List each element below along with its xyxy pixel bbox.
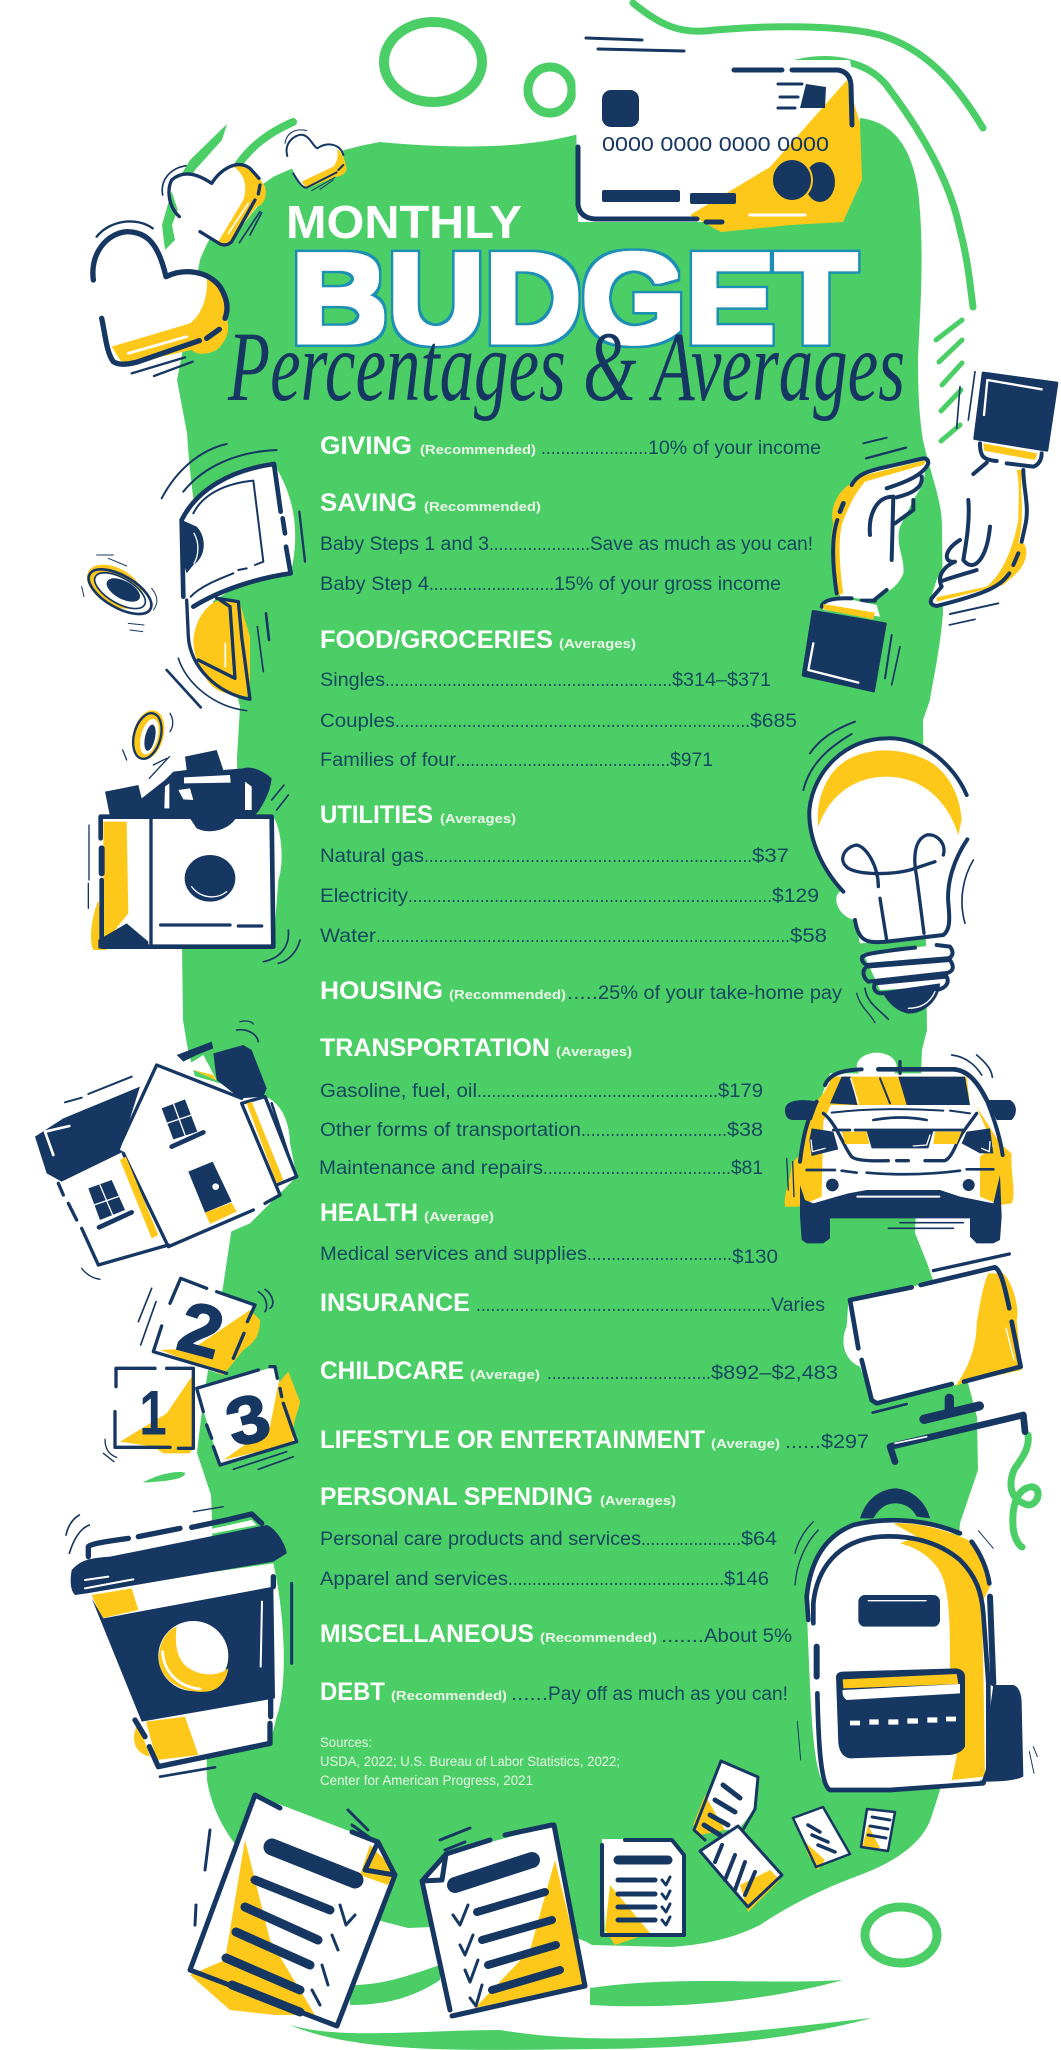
row: couples: $685: [750, 711, 797, 732]
document 5: [700, 1826, 782, 1912]
row: food and groceries: (Averages): [559, 636, 636, 651]
row: lifestyle or entertainment: $297: [821, 1432, 869, 1453]
row: saving: SAVING: [320, 489, 417, 517]
row: debt: DEBT: [320, 1678, 385, 1706]
row: water: Water: [320, 926, 377, 947]
row: other transportation: Other forms of transportation: [320, 1120, 581, 1141]
row: maintenance: [319, 1158, 763, 1179]
row: personal care: Personal care products and services: [320, 1529, 641, 1550]
block 3: 3: [218, 1380, 278, 1462]
card number: 0000 0000 0000 0000: [602, 134, 829, 156]
row: childcare: ..................................: [547, 1363, 711, 1384]
row: natural gas: Natural gas: [320, 846, 424, 867]
row: gasoline: $179: [718, 1081, 763, 1102]
row: singles: ............................................................: [385, 670, 672, 691]
row: insurance: [320, 1289, 825, 1317]
row: apparel: $146: [724, 1569, 769, 1590]
block 2: 2: [170, 1286, 231, 1375]
row: utilities: UTILITIES: [320, 801, 433, 829]
row: couples: Couples: [320, 711, 395, 732]
row: utilities: [320, 801, 516, 829]
row: housing: (Recommended): [449, 987, 566, 1002]
row: miscellaneous: [320, 1620, 792, 1648]
row: water: $58: [790, 926, 827, 947]
row: electricity: ............................................................................: [408, 886, 772, 907]
row: utilities: (Averages): [440, 811, 516, 826]
row: childcare: [320, 1357, 838, 1385]
row: health: HEALTH: [320, 1199, 418, 1227]
row: gasoline: ..................................................: [477, 1081, 718, 1102]
heading: budget: BUDGET: [291, 227, 857, 369]
block 1: 1: [139, 1378, 167, 1448]
row: housing: [320, 977, 843, 1005]
row: personal spending: PERSONAL SPENDING: [320, 1483, 593, 1511]
document 7: [861, 1809, 895, 1851]
row: housing: 25% of your take-home pay: [598, 983, 843, 1004]
row: insurance: Varies: [771, 1295, 825, 1316]
document 2: [422, 1825, 585, 2016]
row: gasoline: [320, 1081, 763, 1102]
row: personal care: $64: [741, 1529, 777, 1550]
row: giving: 10% of your income: [648, 438, 821, 459]
green background blob: [177, 118, 978, 1947]
row: saving: (Recommended): [424, 499, 541, 514]
sources: [320, 1735, 620, 1788]
document 3: [602, 1839, 684, 1945]
icon: house and number blocks: [35, 1021, 300, 1483]
icon: car and monitor: [785, 1053, 1025, 1462]
row: medical: Medical services and supplies: [320, 1244, 587, 1265]
block 3: [197, 1367, 300, 1469]
row: miscellaneous: .......: [661, 1626, 704, 1647]
document 1: [190, 1795, 395, 2026]
row: food and groceries: FOOD/GROCERIES: [320, 626, 553, 654]
row: apparel: [320, 1569, 769, 1590]
row: miscellaneous: MISCELLANEOUS: [320, 1620, 534, 1648]
coin left: [79, 555, 158, 632]
row: lifestyle or entertainment: ......: [785, 1432, 821, 1453]
row: childcare: $892–$2,483: [711, 1363, 838, 1384]
row: baby steps 1 and 3: [320, 534, 813, 555]
row: debt: ......: [511, 1684, 548, 1705]
row: baby steps 1 and 3: Save as much as you can!: [590, 534, 813, 555]
row: families of four: $971: [670, 750, 713, 771]
row: gasoline: Gasoline, fuel, oil: [320, 1081, 477, 1102]
row: families of four: [320, 750, 713, 771]
row: miscellaneous: About 5%: [704, 1626, 792, 1647]
icon: giving and receiving hands: [803, 372, 1057, 691]
block 2: [138, 1278, 273, 1375]
row: personal care: .....................: [641, 1529, 741, 1550]
row: electricity: $129: [772, 886, 819, 907]
row: medical: ..............................: [587, 1244, 732, 1265]
row: personal spending: (Averages): [600, 1493, 676, 1508]
row: other transportation: [320, 1120, 763, 1141]
row: baby step 4: [320, 574, 781, 595]
row: transportation: TRANSPORTATION: [320, 1034, 550, 1062]
row: health: (Average): [424, 1209, 494, 1224]
row: baby step 4: 15% of your gross income: [554, 574, 781, 595]
row: debt: [320, 1678, 788, 1706]
falling money bill: [162, 444, 305, 711]
row: families of four: Families of four: [320, 750, 457, 771]
monitor: [843, 1254, 1025, 1462]
row: giving: ......................: [541, 438, 648, 459]
row: electricity: Electricity: [320, 886, 409, 907]
budget list: [319, 432, 869, 1788]
shopping bag: [88, 750, 300, 963]
row: miscellaneous: (Recommended): [540, 1630, 657, 1645]
row: apparel: .............................................: [508, 1569, 724, 1590]
sources: Sources:: [320, 1735, 372, 1750]
row: personal care: [320, 1529, 777, 1550]
icon: money, coins and shopping bag: [79, 444, 305, 963]
row: insurance: .............................................................: [476, 1295, 771, 1316]
icon: credit card: [575, 38, 862, 232]
row: baby steps 1 and 3: Baby Steps 1 and 3: [320, 534, 489, 555]
row: debt: (Recommended): [391, 1688, 507, 1703]
document 4: [693, 1761, 758, 1840]
heading: monthly: MONTHLY: [286, 196, 522, 248]
row: baby step 4: ..........................: [429, 574, 554, 595]
icon: light bulb: [803, 722, 973, 1023]
car: [785, 1053, 1016, 1243]
row: medical: $130: [732, 1247, 778, 1268]
hand left: [803, 438, 928, 691]
row: medical: [320, 1244, 778, 1268]
block 1: [103, 1368, 193, 1462]
row: saving: [320, 489, 541, 517]
row: natural gas: $37: [752, 846, 789, 867]
row: other transportation: $38: [727, 1120, 763, 1141]
row: health: [320, 1199, 494, 1227]
hand right: [930, 372, 1057, 625]
row: giving: GIVING: [320, 432, 412, 460]
icon: hearts: [93, 130, 347, 376]
row: transportation: (Averages): [556, 1044, 632, 1059]
row: childcare: (Average): [470, 1367, 540, 1382]
row: lifestyle or entertainment: LIFESTYLE OR ENTERTAINMENT: [320, 1426, 705, 1454]
row: singles: $314–$371: [672, 670, 771, 691]
row: apparel: Apparel and services: [320, 1569, 508, 1590]
row: water: ......................................................................................: [376, 926, 790, 947]
row: families of four: .............................................: [456, 750, 670, 771]
sources: Center for American Progress, 2021: [320, 1773, 533, 1788]
row: insurance: INSURANCE: [320, 1289, 470, 1317]
row: baby steps 1 and 3: .....................: [489, 534, 590, 555]
row: couples: ..........................................................................: [395, 711, 750, 732]
document 6: [793, 1807, 850, 1870]
coin upper: [123, 707, 173, 778]
title: Monthly Budget Percentages & Averages: [227, 196, 905, 422]
row: maintenance: .......................................: [543, 1158, 731, 1179]
row: natural gas: ....................................................................: [424, 846, 752, 867]
row: other transportation: ..............................: [581, 1120, 727, 1141]
icon: document pages: [190, 1761, 895, 2026]
row: singles: Singles: [320, 670, 385, 691]
row: childcare: CHILDCARE: [320, 1357, 464, 1385]
row: giving: (Recommended): [420, 442, 536, 457]
row: lifestyle or entertainment: (Average): [711, 1436, 780, 1451]
row: baby step 4: Baby Step 4: [320, 574, 429, 595]
icon: backpack: [795, 1488, 1037, 1790]
sources: USDA, 2022; U.S. Bureau of Labor Statistics, 2022;: [320, 1754, 620, 1769]
row: maintenance: $81: [731, 1158, 763, 1179]
row: debt: Pay off as much as you can!: [548, 1684, 788, 1705]
row: housing: .....: [567, 983, 598, 1004]
row: maintenance: Maintenance and repairs: [319, 1158, 543, 1179]
row: housing: HOUSING: [320, 977, 443, 1005]
icon: coffee cup: [66, 1507, 292, 1777]
house: [35, 1021, 297, 1279]
row: giving: [320, 432, 821, 460]
